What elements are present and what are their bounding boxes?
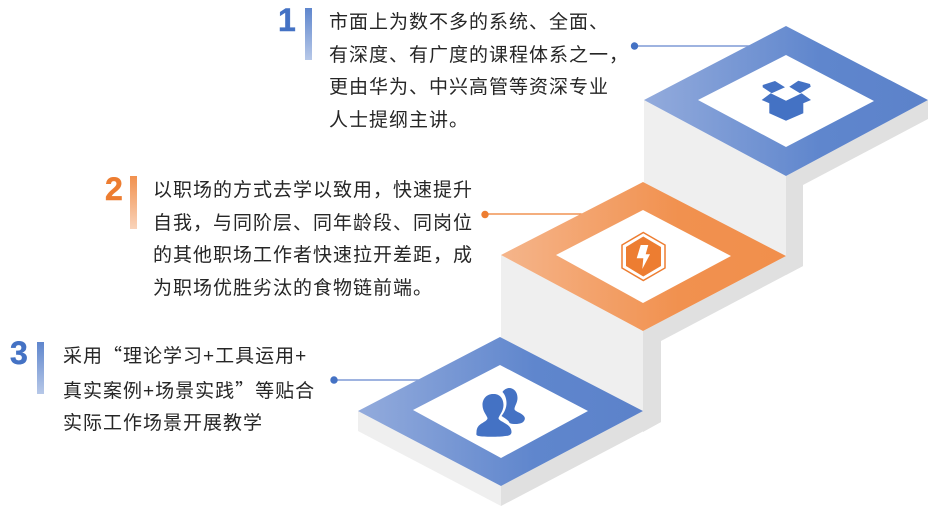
icon: two people — [476, 388, 525, 437]
text block 1: 更由华为、中兴高管等资深专业 — [329, 77, 609, 98]
text block 3 — [63, 341, 315, 434]
step 1 top — [644, 26, 928, 176]
number 1: 1 — [278, 2, 296, 38]
text block 2: 为职场优胜劣汰的食物链前端。 — [153, 278, 433, 298]
icon: lightning hexagon — [622, 232, 665, 280]
bar 1 — [305, 8, 312, 60]
step 2 sides — [501, 247, 803, 432]
text block 3: 实际工作场景开展教学 — [63, 413, 263, 434]
number 2: 2 — [105, 171, 123, 207]
bar 3 — [37, 342, 44, 394]
text block 3: 采用“理论学习+工具运用+ — [63, 341, 307, 368]
icon: open box — [762, 81, 811, 121]
connector line 1 — [631, 42, 750, 50]
text block 3: 真实案例+场景实践”等贴合 — [63, 376, 315, 402]
step 3 top — [358, 337, 643, 486]
text block 2: 的其他职场工作者快速拉开差距，成 — [153, 245, 473, 266]
step 3 sides — [358, 401, 661, 506]
step 1 sides — [644, 100, 928, 275]
text block 2: 自我，与同阶层、同年龄段、同岗位 — [153, 212, 473, 234]
text block 2 — [153, 180, 473, 298]
step 2 top — [501, 182, 786, 331]
connector line 3 — [330, 376, 420, 384]
text block 1 — [329, 12, 629, 130]
text block 1: 市面上为数不多的系统、全面、 — [329, 12, 609, 33]
bar 2 — [130, 176, 137, 229]
text block 1: 人士提纲主讲。 — [329, 110, 469, 130]
connector line 2 — [481, 211, 582, 218]
number 3: 3 — [10, 335, 28, 371]
text block 2: 以职场的方式去学以致用，快速提升 — [153, 180, 473, 201]
text block 1: 有深度、有广度的课程体系之一， — [329, 44, 629, 66]
